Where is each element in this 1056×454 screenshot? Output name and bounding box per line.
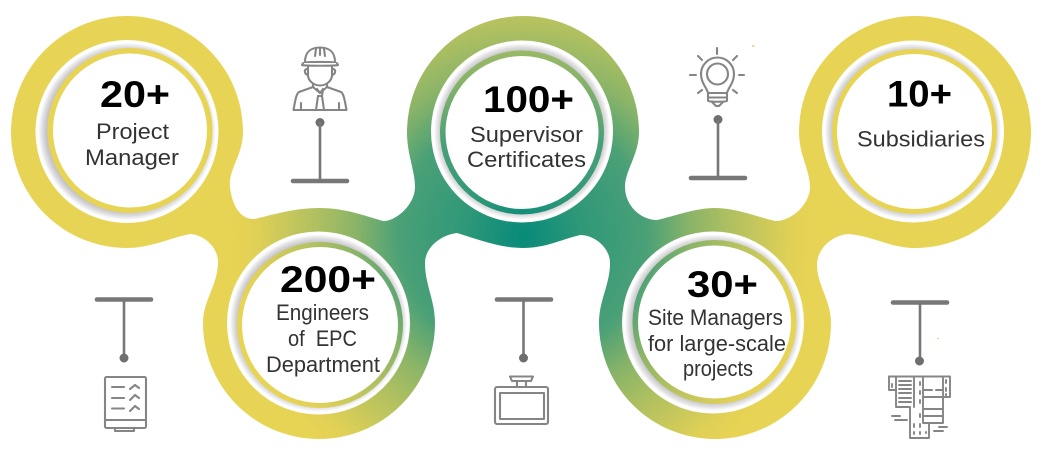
panel: 200+ Engineers of EPC Department — [227, 232, 410, 414]
pin: monitor — [497, 300, 551, 362]
icon: monitor — [495, 376, 548, 424]
number: 10+: 10+ — [887, 74, 952, 114]
icon: engineer with hard hat — [294, 48, 346, 110]
number: 30+: 30+ — [687, 264, 758, 305]
label: Site Managers for large-scale projects — [648, 305, 786, 381]
panel: 20+ Project Manager — [36, 40, 218, 223]
label: Engineers of EPC Department — [266, 300, 380, 377]
panel: 30+ Site Managers for large-scale projects — [622, 232, 804, 414]
panel: 100+ Supervisor Certificates — [431, 40, 613, 222]
number: 20+: 20+ — [100, 74, 170, 115]
icon: light bulb — [690, 48, 744, 106]
label: Supervisor Certificates — [467, 122, 586, 172]
number: 100+: 100+ — [483, 79, 574, 120]
pin: light bulb — [691, 115, 745, 178]
panel: 10+ Subsidiaries — [822, 40, 1004, 222]
label: Project Manager — [85, 119, 179, 170]
speck: orange — [752, 46, 754, 47]
label: Supervisor Certificates: Certificates — [467, 147, 586, 172]
label: Engineers of EPC Department: Engineers — [276, 300, 369, 325]
label: Project Manager: Project — [96, 119, 169, 144]
pin: engineer — [293, 118, 347, 181]
pin: buildings — [893, 302, 947, 366]
label: Site Managers for large-scale projects: for large-scale — [648, 331, 786, 356]
label: Engineers of EPC Department: Department — [266, 352, 380, 377]
icon: office buildings — [889, 376, 950, 438]
label: Site Managers for large-scale projects: Site Managers — [648, 305, 783, 330]
label: Engineers of EPC Department: of EPC — [288, 326, 357, 351]
label: Site Managers for large-scale projects: projects — [683, 356, 753, 381]
icon: checklist — [105, 377, 146, 431]
label: Subsidiaries: Subsidiaries — [857, 126, 985, 152]
pin: checklist — [97, 300, 151, 362]
speck: yellow — [937, 338, 939, 339]
label: Supervisor Certificates: Supervisor — [470, 122, 583, 147]
number: 200+: 200+ — [280, 259, 376, 300]
label: Project Manager: Manager — [85, 145, 179, 170]
